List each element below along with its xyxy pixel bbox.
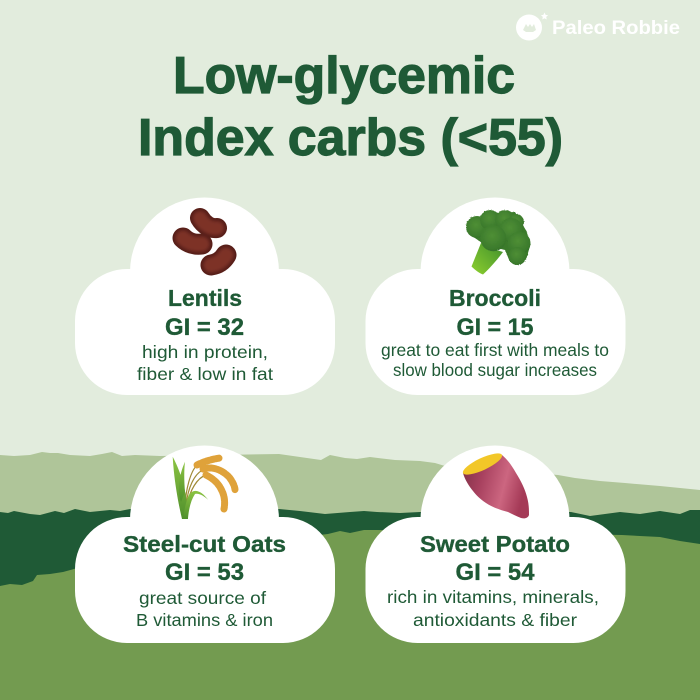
GI value: GI = 32 xyxy=(165,314,244,341)
description xyxy=(136,588,273,630)
description: high in protein, xyxy=(142,342,268,362)
card shape xyxy=(366,446,626,643)
food name: Sweet Potato xyxy=(420,531,570,557)
description: great source of xyxy=(139,588,266,608)
description: slow blood sugar increases xyxy=(393,360,597,380)
GI value: GI = 54 xyxy=(456,559,535,586)
potato skin xyxy=(463,455,529,518)
mid green foreground xyxy=(0,530,700,700)
icon: sweet potato xyxy=(460,449,529,518)
food name: Lentils xyxy=(168,285,242,311)
icon: oat stalk xyxy=(173,457,235,519)
description: antioxidants & fiber xyxy=(413,610,577,630)
icon: broccoli xyxy=(466,210,530,274)
logo wordmark: Paleo Robbie xyxy=(552,18,680,39)
card: Sweet Potato xyxy=(366,446,626,643)
card: Lentils xyxy=(75,198,335,395)
landscape hills xyxy=(0,452,700,700)
stems xyxy=(185,465,206,505)
card shape xyxy=(75,446,335,643)
title: Index carbs (<55) xyxy=(138,109,563,167)
green leaves xyxy=(173,457,208,519)
description: B vitamins & iron xyxy=(136,610,273,630)
dark green ridge xyxy=(0,509,700,600)
food name: Steel-cut Oats xyxy=(123,531,286,557)
description xyxy=(381,340,609,380)
icon: kidney beans xyxy=(183,218,226,265)
description: fiber & low in fat xyxy=(137,364,273,384)
logo mark xyxy=(516,12,548,40)
card: Broccoli xyxy=(366,198,626,395)
brand logo xyxy=(516,12,680,40)
title: Low-glycemic xyxy=(173,47,515,105)
description: great to eat first with meals to xyxy=(381,340,609,360)
card: Steel-cut Oats xyxy=(75,446,335,643)
yellow cut flesh xyxy=(460,449,505,479)
card shape xyxy=(366,198,626,395)
title xyxy=(138,47,563,167)
card shape xyxy=(75,198,335,395)
light green ridge xyxy=(0,452,700,530)
description xyxy=(137,342,273,384)
GI value: GI = 15 xyxy=(456,314,534,341)
description: rich in vitamins, minerals, xyxy=(387,587,599,607)
food name: Broccoli xyxy=(449,285,541,311)
grain heads xyxy=(197,458,235,509)
GI value: GI = 53 xyxy=(165,559,244,586)
description xyxy=(387,587,599,630)
